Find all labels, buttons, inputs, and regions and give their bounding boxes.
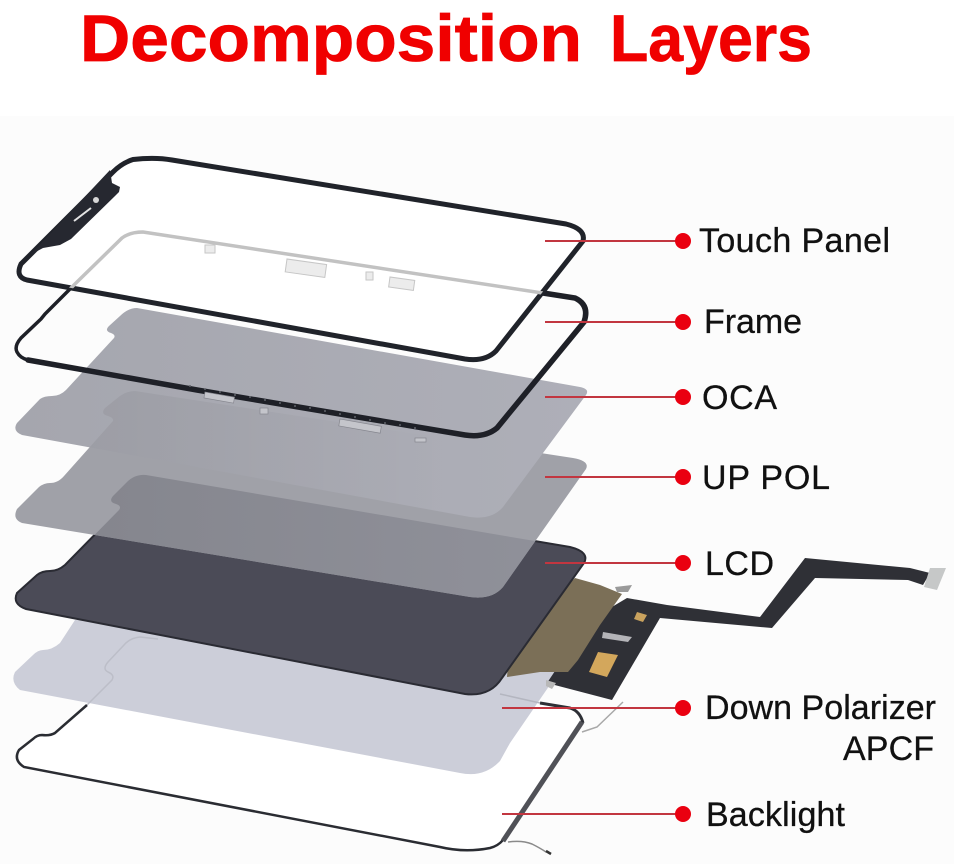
frame seen through the glass — [69, 230, 544, 294]
label: backlight: Backlight — [706, 796, 846, 834]
label: UP POL: UP POL — [702, 459, 830, 497]
flex cable — [507, 558, 946, 700]
up polarizer seen through OCA — [90, 392, 154, 458]
label: down polarizer: Down Polarizer — [705, 689, 936, 727]
label: APCF: APCF — [843, 730, 934, 768]
layer: LCD — [16, 475, 585, 694]
label: LCD: LCD — [705, 545, 774, 583]
label: touch panel: Touch Panel — [699, 222, 890, 260]
backlight outline seen through polarizer — [87, 637, 158, 705]
title — [80, 1, 812, 75]
layer: frame — [16, 232, 586, 442]
label: OCA: OCA — [702, 379, 777, 417]
title: Layers — [610, 1, 812, 75]
layer: down polarizer — [13, 620, 556, 774]
LCD seen through up polarizer — [94, 475, 536, 598]
backlight wires — [508, 841, 546, 852]
frame tabs — [204, 392, 426, 442]
label: frame: Frame — [704, 303, 802, 341]
layer: backlight — [17, 637, 623, 854]
layer: touch panel — [16, 156, 586, 362]
callout lines and dots — [502, 233, 691, 822]
frame rivet dots — [189, 385, 416, 429]
layer: OCA — [15, 308, 588, 518]
title: Decomposition — [80, 1, 582, 75]
touch panel notch — [30, 170, 120, 255]
layer: up polarizer — [15, 447, 587, 598]
